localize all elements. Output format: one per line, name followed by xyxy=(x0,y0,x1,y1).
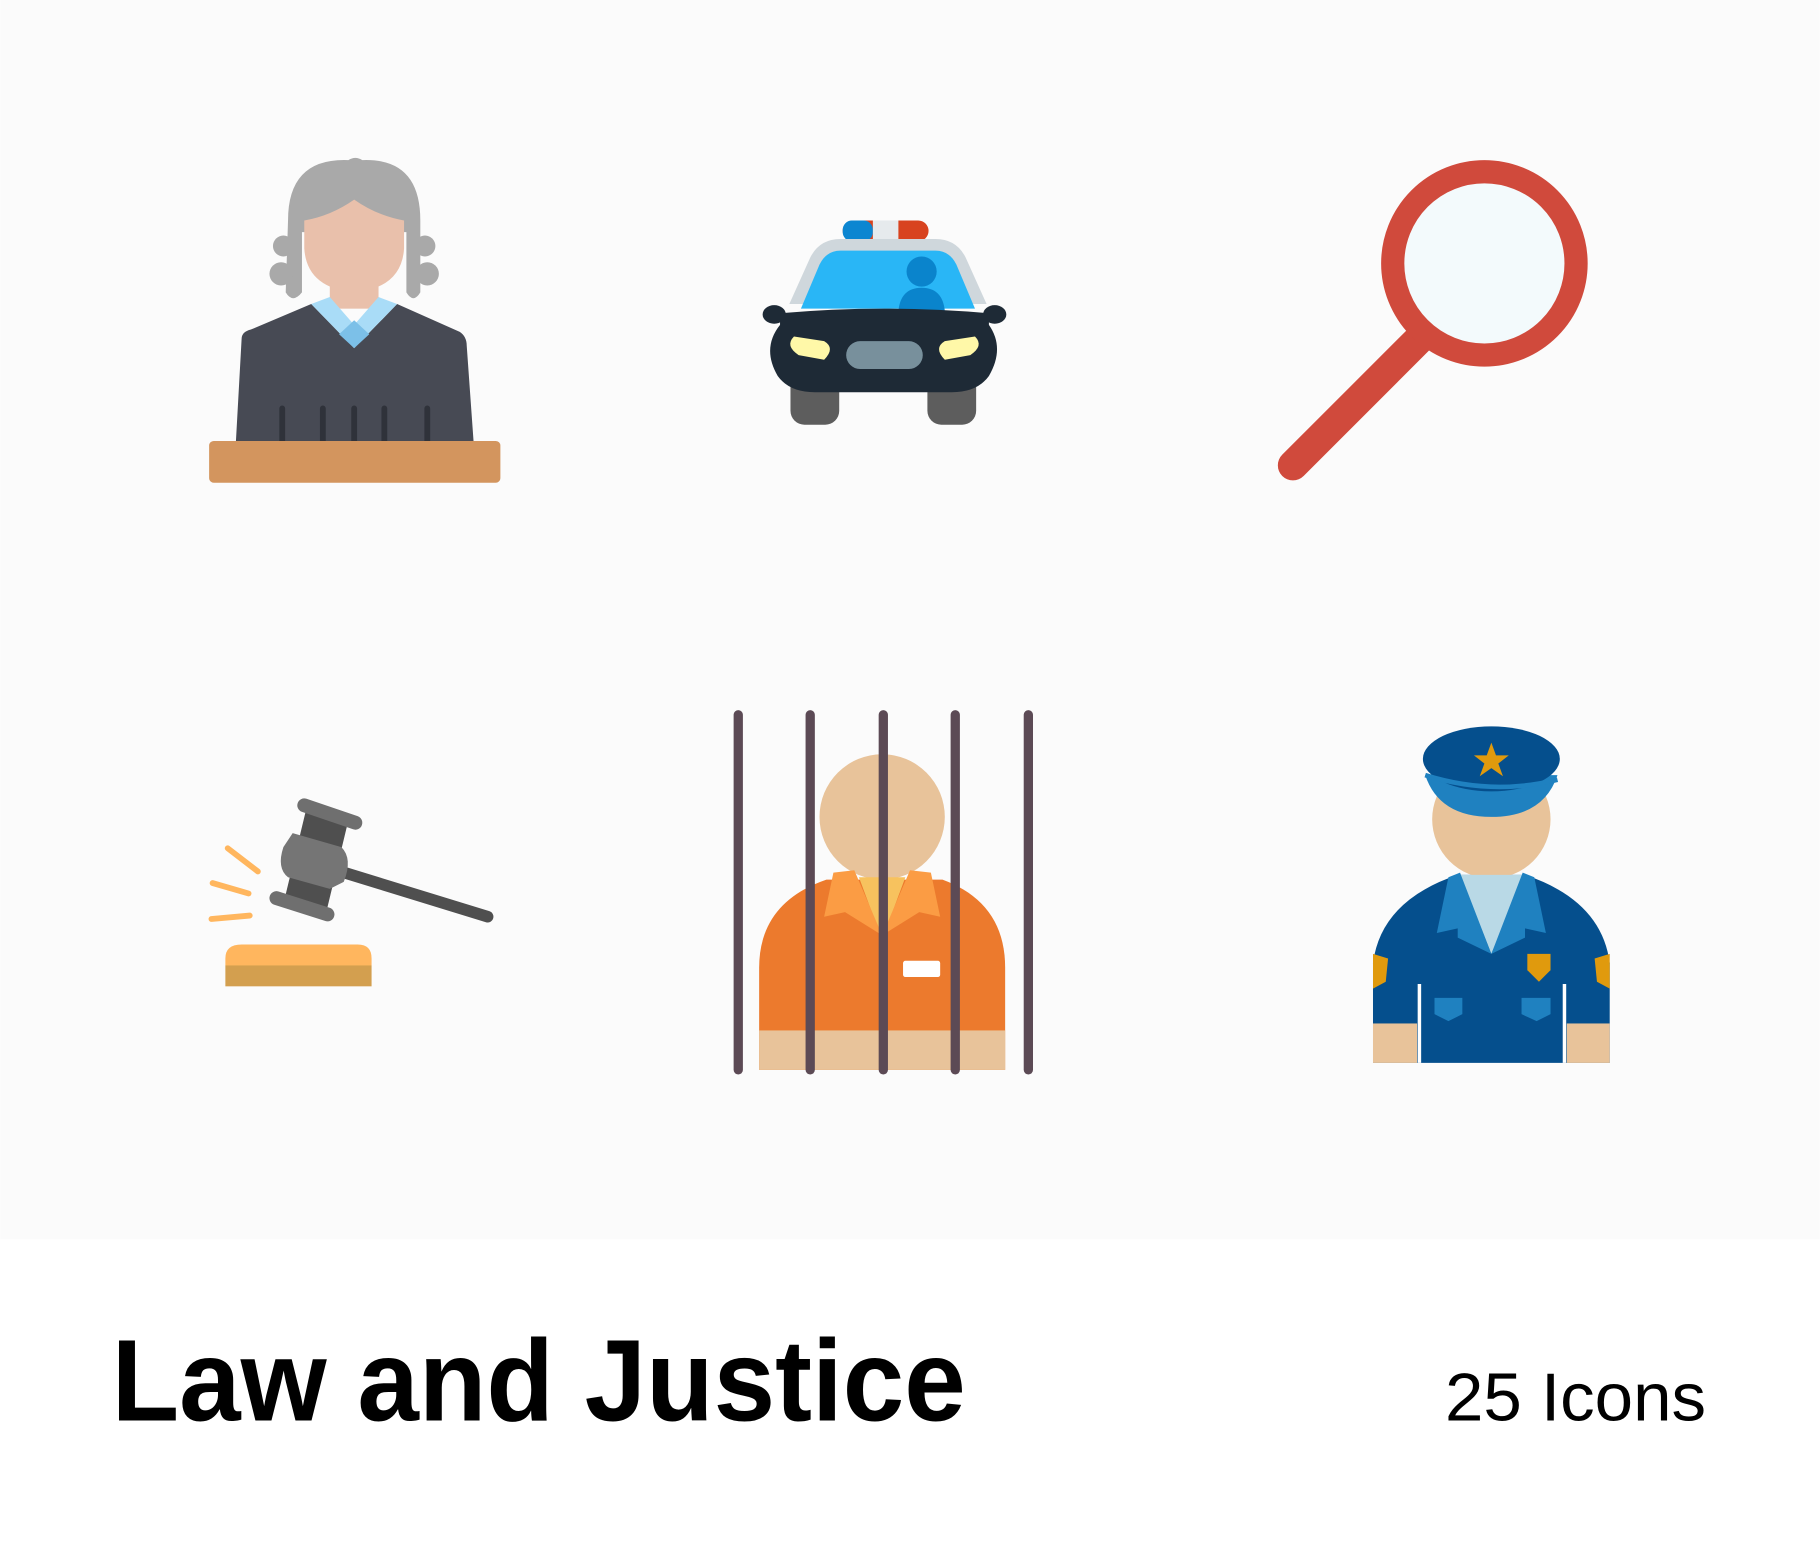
icon: police officer xyxy=(1373,726,1610,1063)
icon: police car xyxy=(763,220,1006,425)
icon: prisoner behind bars xyxy=(738,715,1028,1070)
icon: magnifying glass xyxy=(1293,172,1576,465)
title: Law and Justice xyxy=(112,1315,966,1445)
icon: gavel xyxy=(211,805,488,986)
icon: judge xyxy=(209,158,500,483)
icon count: 25 Icons xyxy=(1445,1360,1706,1435)
